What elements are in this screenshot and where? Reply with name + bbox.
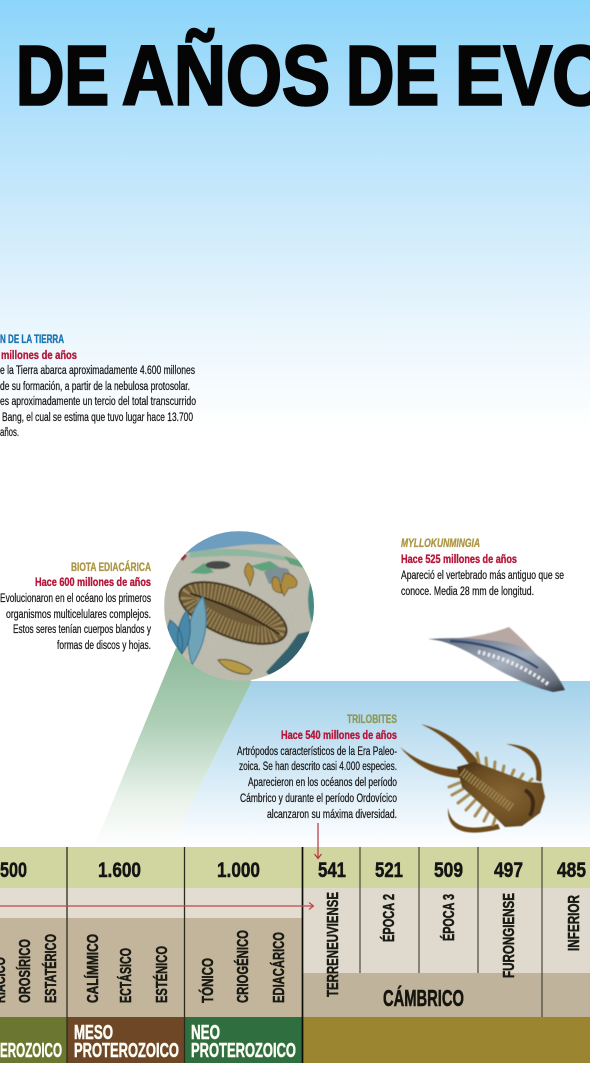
vertical period labels: CRIOGÉNICO [235, 930, 252, 1003]
era: paleoproterozoico [0, 1017, 67, 1063]
text block: formación de la Tierra: de su formación, a partir de la nebulosa protosolar. [0, 381, 190, 393]
illustration: Ediacaran biota circle [164, 531, 316, 682]
text block: myllokunmingia [401, 538, 564, 598]
vertical period labels: EDIACÁRICO [271, 932, 288, 1003]
row: epochs left [0, 888, 303, 918]
text block: myllokunmingia: conoce. Media 28 mm de longitud. [401, 586, 534, 598]
age numbers: 521 [375, 859, 403, 882]
text block: trilobites: Cámbrico y durante el período Ordovícico [240, 793, 397, 805]
vertical period labels: ÉPOCA 2 [381, 894, 398, 942]
era labels [0, 1022, 296, 1062]
text block: biota ediacárica: Evolucionaron en el océano los primeros [0, 593, 151, 605]
era labels: NEO [191, 1022, 220, 1044]
era labels: PROTEROZOICO [191, 1040, 296, 1062]
title [16, 28, 590, 122]
title: DE [346, 28, 439, 122]
text block: trilobites: Hace 540 millones de años [281, 730, 397, 742]
sky background [0, 0, 590, 430]
sea band [170, 681, 590, 847]
text block: biota ediacárica: organismos multicelulares complejos. [6, 609, 151, 621]
text block: biota ediacárica: Estos seres tenían cuerpos blandos y [13, 624, 151, 636]
text block: biota ediacárica [0, 561, 151, 652]
text block: myllokunmingia: Hace 525 millones de años [401, 554, 517, 566]
text block: formación de la Tierra: e la Tierra abarca aproximadamente 4.600 millones [0, 365, 195, 377]
row: periods right [303, 973, 590, 1017]
green beam from circle [94, 648, 252, 847]
age numbers: 509 [434, 859, 463, 882]
vertical period labels: TERRENEUVIENSE [325, 892, 342, 997]
text block: trilobites: zoica. Se han descrito casi 4.000 especies. [239, 761, 397, 773]
age numbers: 1.600 [98, 859, 141, 882]
title: DE [16, 28, 109, 122]
age numbers: 541 [318, 859, 346, 882]
text block: trilobites: Aparecieron en los océanos del período [248, 777, 397, 789]
text block: trilobites: alcanzaron su máxima diversidad. [267, 809, 397, 821]
illustration: myllokunmingia fish [428, 627, 565, 692]
row: ages [0, 847, 590, 888]
vertical period labels: TÓNICO [199, 958, 217, 1003]
illustration: trilobite [400, 724, 545, 833]
text block: trilobites: TRILOBITES [347, 714, 397, 726]
vertical period labels [0, 892, 583, 1003]
age numbers [0, 859, 586, 882]
vertical period labels: FURONGIENSE [501, 893, 518, 978]
row: periods left [0, 918, 303, 1017]
vertical period labels: ÉPOCA 3 [441, 894, 458, 941]
row: epochs right [303, 888, 590, 973]
text block: biota ediacárica: BIOTA EDIACÁRICA [71, 561, 151, 574]
era labels: MESO [74, 1022, 113, 1044]
age numbers: 1.000 [217, 859, 260, 882]
text block: formación de la Tierra [0, 334, 196, 439]
text block: trilobites: Artrópodos característicos de la Era Paleo- [237, 746, 397, 758]
text block: myllokunmingia: MYLLOKUNMINGIA [401, 538, 480, 550]
age numbers: 497 [494, 859, 523, 882]
text block: formación de la Tierra: años. [0, 427, 19, 439]
era: mesoproterozoico [67, 1017, 185, 1063]
text block: biota ediacárica: Hace 600 millones de años [35, 577, 151, 589]
text block: trilobites [237, 714, 397, 821]
text block: biota ediacárica: formas de discos y hojas. [57, 640, 151, 652]
arrow: vertical red [314, 823, 322, 858]
text block: formación de la Tierra: N DE LA TIERRA [0, 334, 64, 346]
era: paleozoico [303, 1017, 590, 1063]
era labels: PROTEROZOICO [74, 1040, 179, 1062]
era labels: EROZOICO [0, 1040, 62, 1062]
timeline table [0, 847, 590, 1063]
vertical period labels: CALÍMMICO [85, 934, 102, 1003]
vertical period labels: ESTÉNICO [154, 946, 171, 1003]
vertical period labels: ECTÁSICO [118, 948, 135, 1003]
arrow: horizontal red [0, 902, 314, 910]
vertical period labels: INFERIOR [566, 895, 583, 951]
era: neoproterozoico [185, 1017, 303, 1063]
label: cámbrico: CÁMBRICO [383, 984, 464, 1011]
text block: formación de la Tierra: es aproximadamente un tercio del total transcurrido [0, 396, 196, 408]
text block: formación de la Tierra: millones de años [1, 350, 77, 362]
illustration: frond body [178, 580, 288, 646]
text block: formación de la Tierra: Bang, el cual se estima que tuvo lugar hace 13.700 [2, 412, 193, 424]
age numbers: 500 [0, 859, 27, 882]
vertical period labels: ESTATÉRICO [43, 934, 60, 1003]
vertical period labels: OROSÍRICO [17, 939, 34, 1003]
title: AÑOS [122, 28, 330, 122]
